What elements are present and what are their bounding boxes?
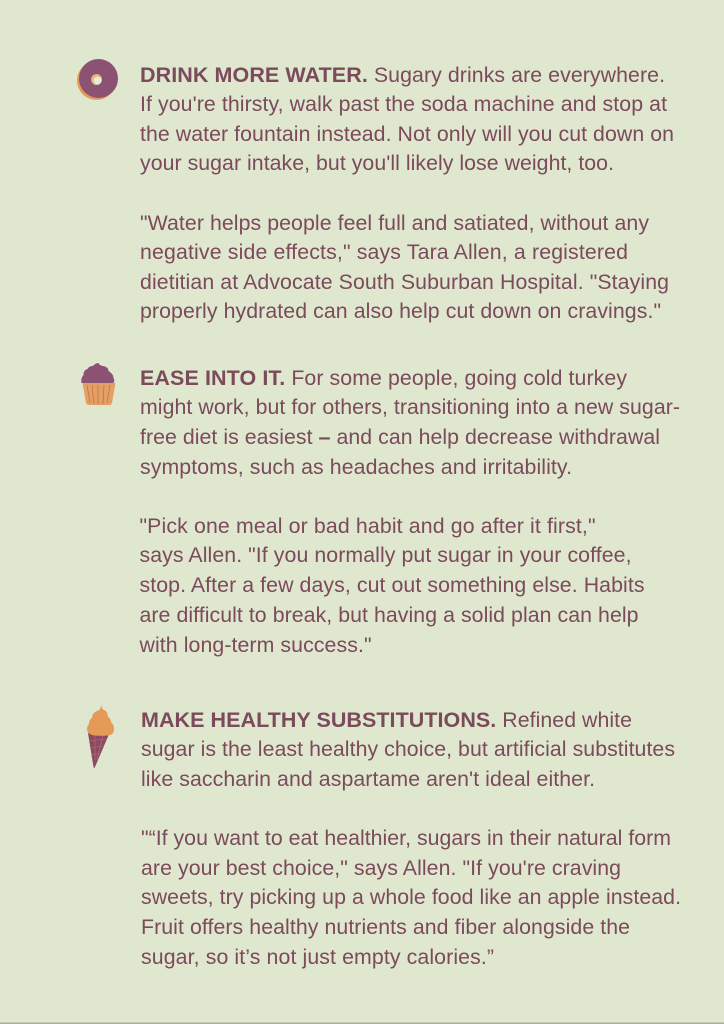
text block: ease into it: EASE INTO IT. For some people, going cold turkey <box>140 366 627 390</box>
text block: water quote: "Water helps people feel full and satiated, without any <box>140 211 649 235</box>
text block: drink more water: If you're thirsty, walk past the soda machine and stop at <box>140 92 667 116</box>
text block: natural sugars quote <box>141 826 681 969</box>
text block: natural sugars quote: are your best choice," says Allen. "If you're craving <box>141 856 621 880</box>
text block: drink more water: the water fountain instead. Not only will you cut down on <box>140 122 674 146</box>
text block: drink more water: DRINK MORE WATER. Sugary drinks are everywhere. <box>140 63 665 87</box>
icon: cupcake <box>81 363 116 405</box>
text block: ease into it: might work, but for others, transitioning into a new sugar- <box>140 395 680 419</box>
text block: natural sugars quote: "“If you want to eat healthier, sugars in their natural form <box>141 826 671 850</box>
text block: allen quote: "Pick one meal or bad habit and go after it first," <box>140 514 596 538</box>
text block: natural sugars quote: Fruit offers healthy nutrients and fiber alongside the <box>141 915 630 939</box>
text block: water quote: negative side effects," says Tara Allen, a registered <box>140 240 628 264</box>
text block: ease into it: symptoms, such as headaches and irritability. <box>140 455 572 479</box>
text block: natural sugars quote: sugar, so it’s not just empty calories.” <box>141 945 494 969</box>
text block: allen quote: are difficult to break, but having a solid plan can help <box>140 603 638 627</box>
text block: water quote: dietitian at Advocate South Suburban Hospital. "Staying <box>140 270 669 294</box>
text block: drink more water <box>140 63 674 175</box>
text block: make healthy substitutions <box>141 708 675 791</box>
text block: allen quote: with long-term success." <box>138 633 372 657</box>
text block: natural sugars quote: sweets, try picking up a whole food like an apple instead. <box>141 885 681 909</box>
text block: allen quote <box>138 514 644 657</box>
text block: water quote <box>140 211 669 323</box>
icon: ice cream cone <box>87 705 114 768</box>
text block: drink more water: your sugar intake, but you'll likely lose weight, too. <box>140 151 614 175</box>
text block: allen quote: says Allen. "If you normally put sugar in your coffee, <box>140 543 632 567</box>
text block: ease into it <box>140 366 680 479</box>
text block: allen quote: stop. After a few days, cut out something else. Habits <box>140 573 644 597</box>
text block: make healthy substitutions: like saccharin and aspartame aren't ideal either. <box>141 767 595 791</box>
text block: water quote: properly hydrated can also help cut down on cravings." <box>140 299 661 323</box>
text block: make healthy substitutions: MAKE HEALTHY SUBSTITUTIONS. Refined white <box>141 708 632 732</box>
icon: donut <box>77 59 118 100</box>
text block: ease into it: free diet is easiest – and can help decrease withdrawal <box>140 425 660 449</box>
text block: make healthy substitutions: sugar is the least healthy choice, but artificial substitutes <box>141 737 675 761</box>
